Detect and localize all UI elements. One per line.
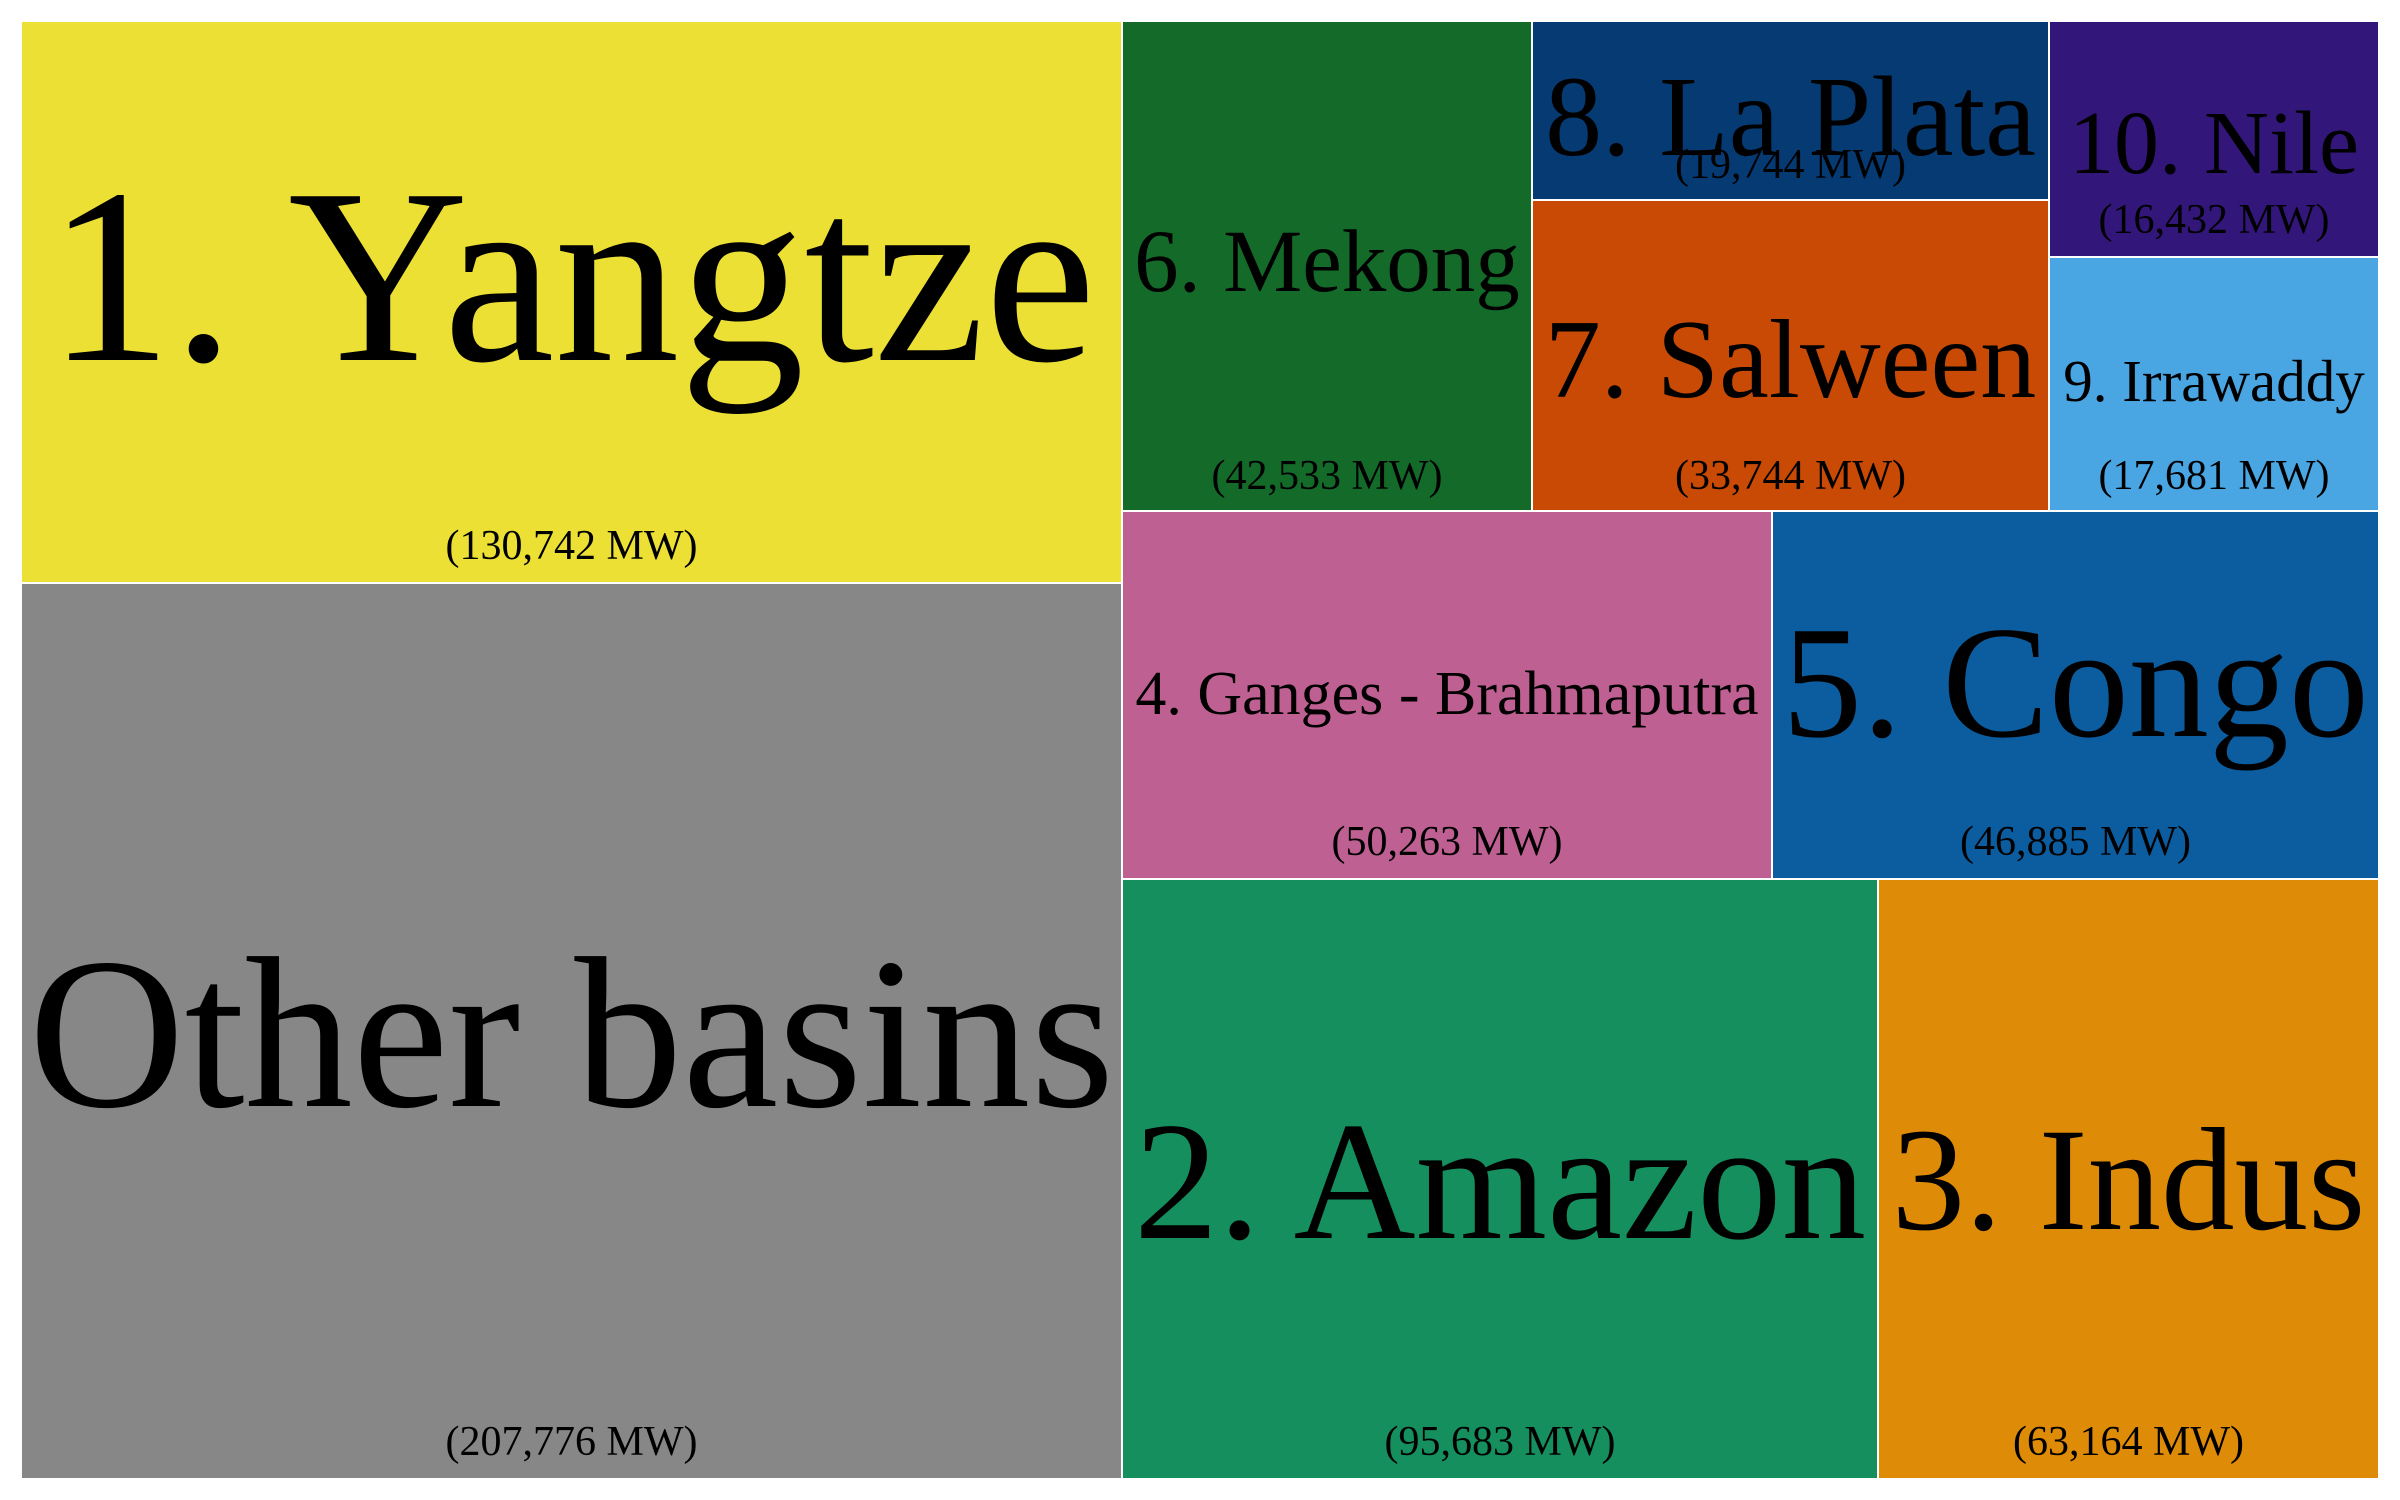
tile: Indus: 3. Indus — [1892, 1098, 2365, 1261]
tile: Nile: 10. Nile — [2069, 94, 2359, 193]
tile: Yangtze: 1. Yangtze — [47, 138, 1096, 415]
tile: Other basins: Other basins — [29, 914, 1114, 1153]
tile: La Plata — [1532, 21, 2049, 200]
tile: Indus: (63,164 MW) — [2013, 1419, 2244, 1465]
tile: Yangtze: (130,742 MW) — [446, 523, 697, 569]
tile: Nile: (16,432 MW) — [2099, 197, 2329, 243]
tile: Amazon: (95,683 MW) — [1385, 1419, 1615, 1465]
tile: Amazon — [1122, 879, 1878, 1479]
tile: Salween: (33,744 MW) — [1675, 453, 1906, 499]
tile: Amazon: 2. Amazon — [1134, 1087, 1866, 1275]
tile: Irrawaddy: (17,681 MW) — [2099, 453, 2329, 499]
tile: La Plata: (19,744 MW) — [1675, 142, 1906, 188]
tile: Salween: 7. Salween — [1545, 298, 2036, 422]
tile: Irrawaddy — [2049, 257, 2379, 511]
tile: Mekong: 6. Mekong — [1134, 213, 1520, 311]
tile: Mekong — [1122, 21, 1532, 511]
tile: Congo: (46,885 MW) — [1960, 819, 2191, 865]
tile: Other basins: (207,776 MW) — [446, 1419, 697, 1465]
tile: Salween — [1532, 200, 2049, 511]
tile: Congo — [1772, 511, 2379, 879]
tile: Ganges - Brahmaputra: 4. Ganges - Brahmaputra — [1135, 660, 1759, 728]
tile: Yangtze — [21, 21, 1122, 583]
tile: Ganges - Brahmaputra: (50,263 MW) — [1332, 819, 1562, 865]
tile: Ganges - Brahmaputra — [1122, 511, 1772, 879]
tile: Congo: 5. Congo — [1782, 593, 2369, 771]
tile: La Plata: 8. La Plata — [1545, 53, 2036, 180]
tile: Indus — [1878, 879, 2379, 1479]
tile: Nile — [2049, 21, 2379, 257]
tile: Other basins — [21, 583, 1122, 1479]
tile: Irrawaddy: 9. Irrawaddy — [2063, 348, 2365, 414]
tile: Mekong: (42,533 MW) — [1212, 453, 1442, 499]
